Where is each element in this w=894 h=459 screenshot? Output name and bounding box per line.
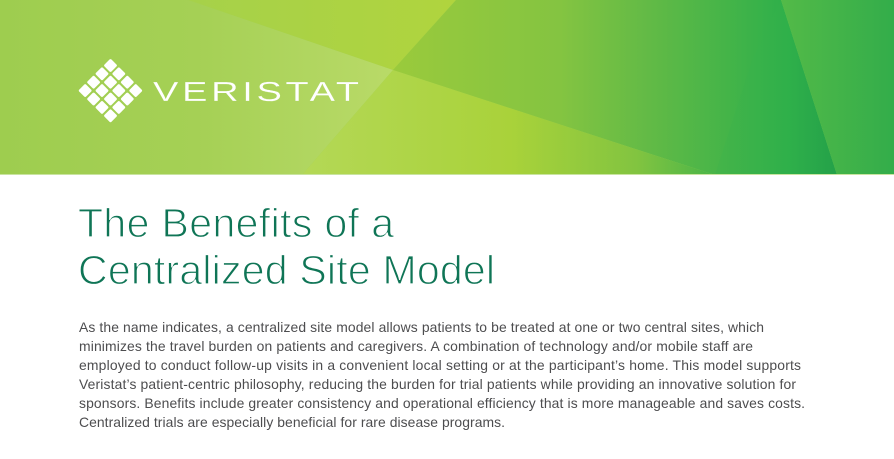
header banner (0, 0, 894, 175)
body paragraph (79, 319, 805, 430)
body paragraph: As the name indicates, a centralized site model allows patients to be treated at one or two central sites, which (79, 319, 764, 335)
icon: diamond grid (78, 59, 143, 123)
body paragraph: employed to conduct follow-up visits in a convenient local setting or at the participant’s home. This model supports (79, 357, 801, 373)
body paragraph: minimizes the travel burden on patients and caregivers. A combination of technology and/or mobile staff are (79, 338, 753, 354)
logo wordmark: VERISTAT (153, 77, 359, 108)
title (78, 200, 495, 293)
title: Centralized Site Model (78, 247, 495, 293)
body paragraph: Centralized trials are especially beneficial for rare disease programs. (79, 414, 505, 430)
title: The Benefits of a (78, 200, 394, 246)
logo: Veristat (78, 59, 359, 123)
body paragraph: sponsors. Benefits include greater consistency and operational efficiency that is more manageable and saves costs. (79, 395, 805, 411)
body paragraph: Veristat’s patient-centric philosophy, reducing the burden for trial patients while providing an innovative solution for (79, 376, 796, 392)
